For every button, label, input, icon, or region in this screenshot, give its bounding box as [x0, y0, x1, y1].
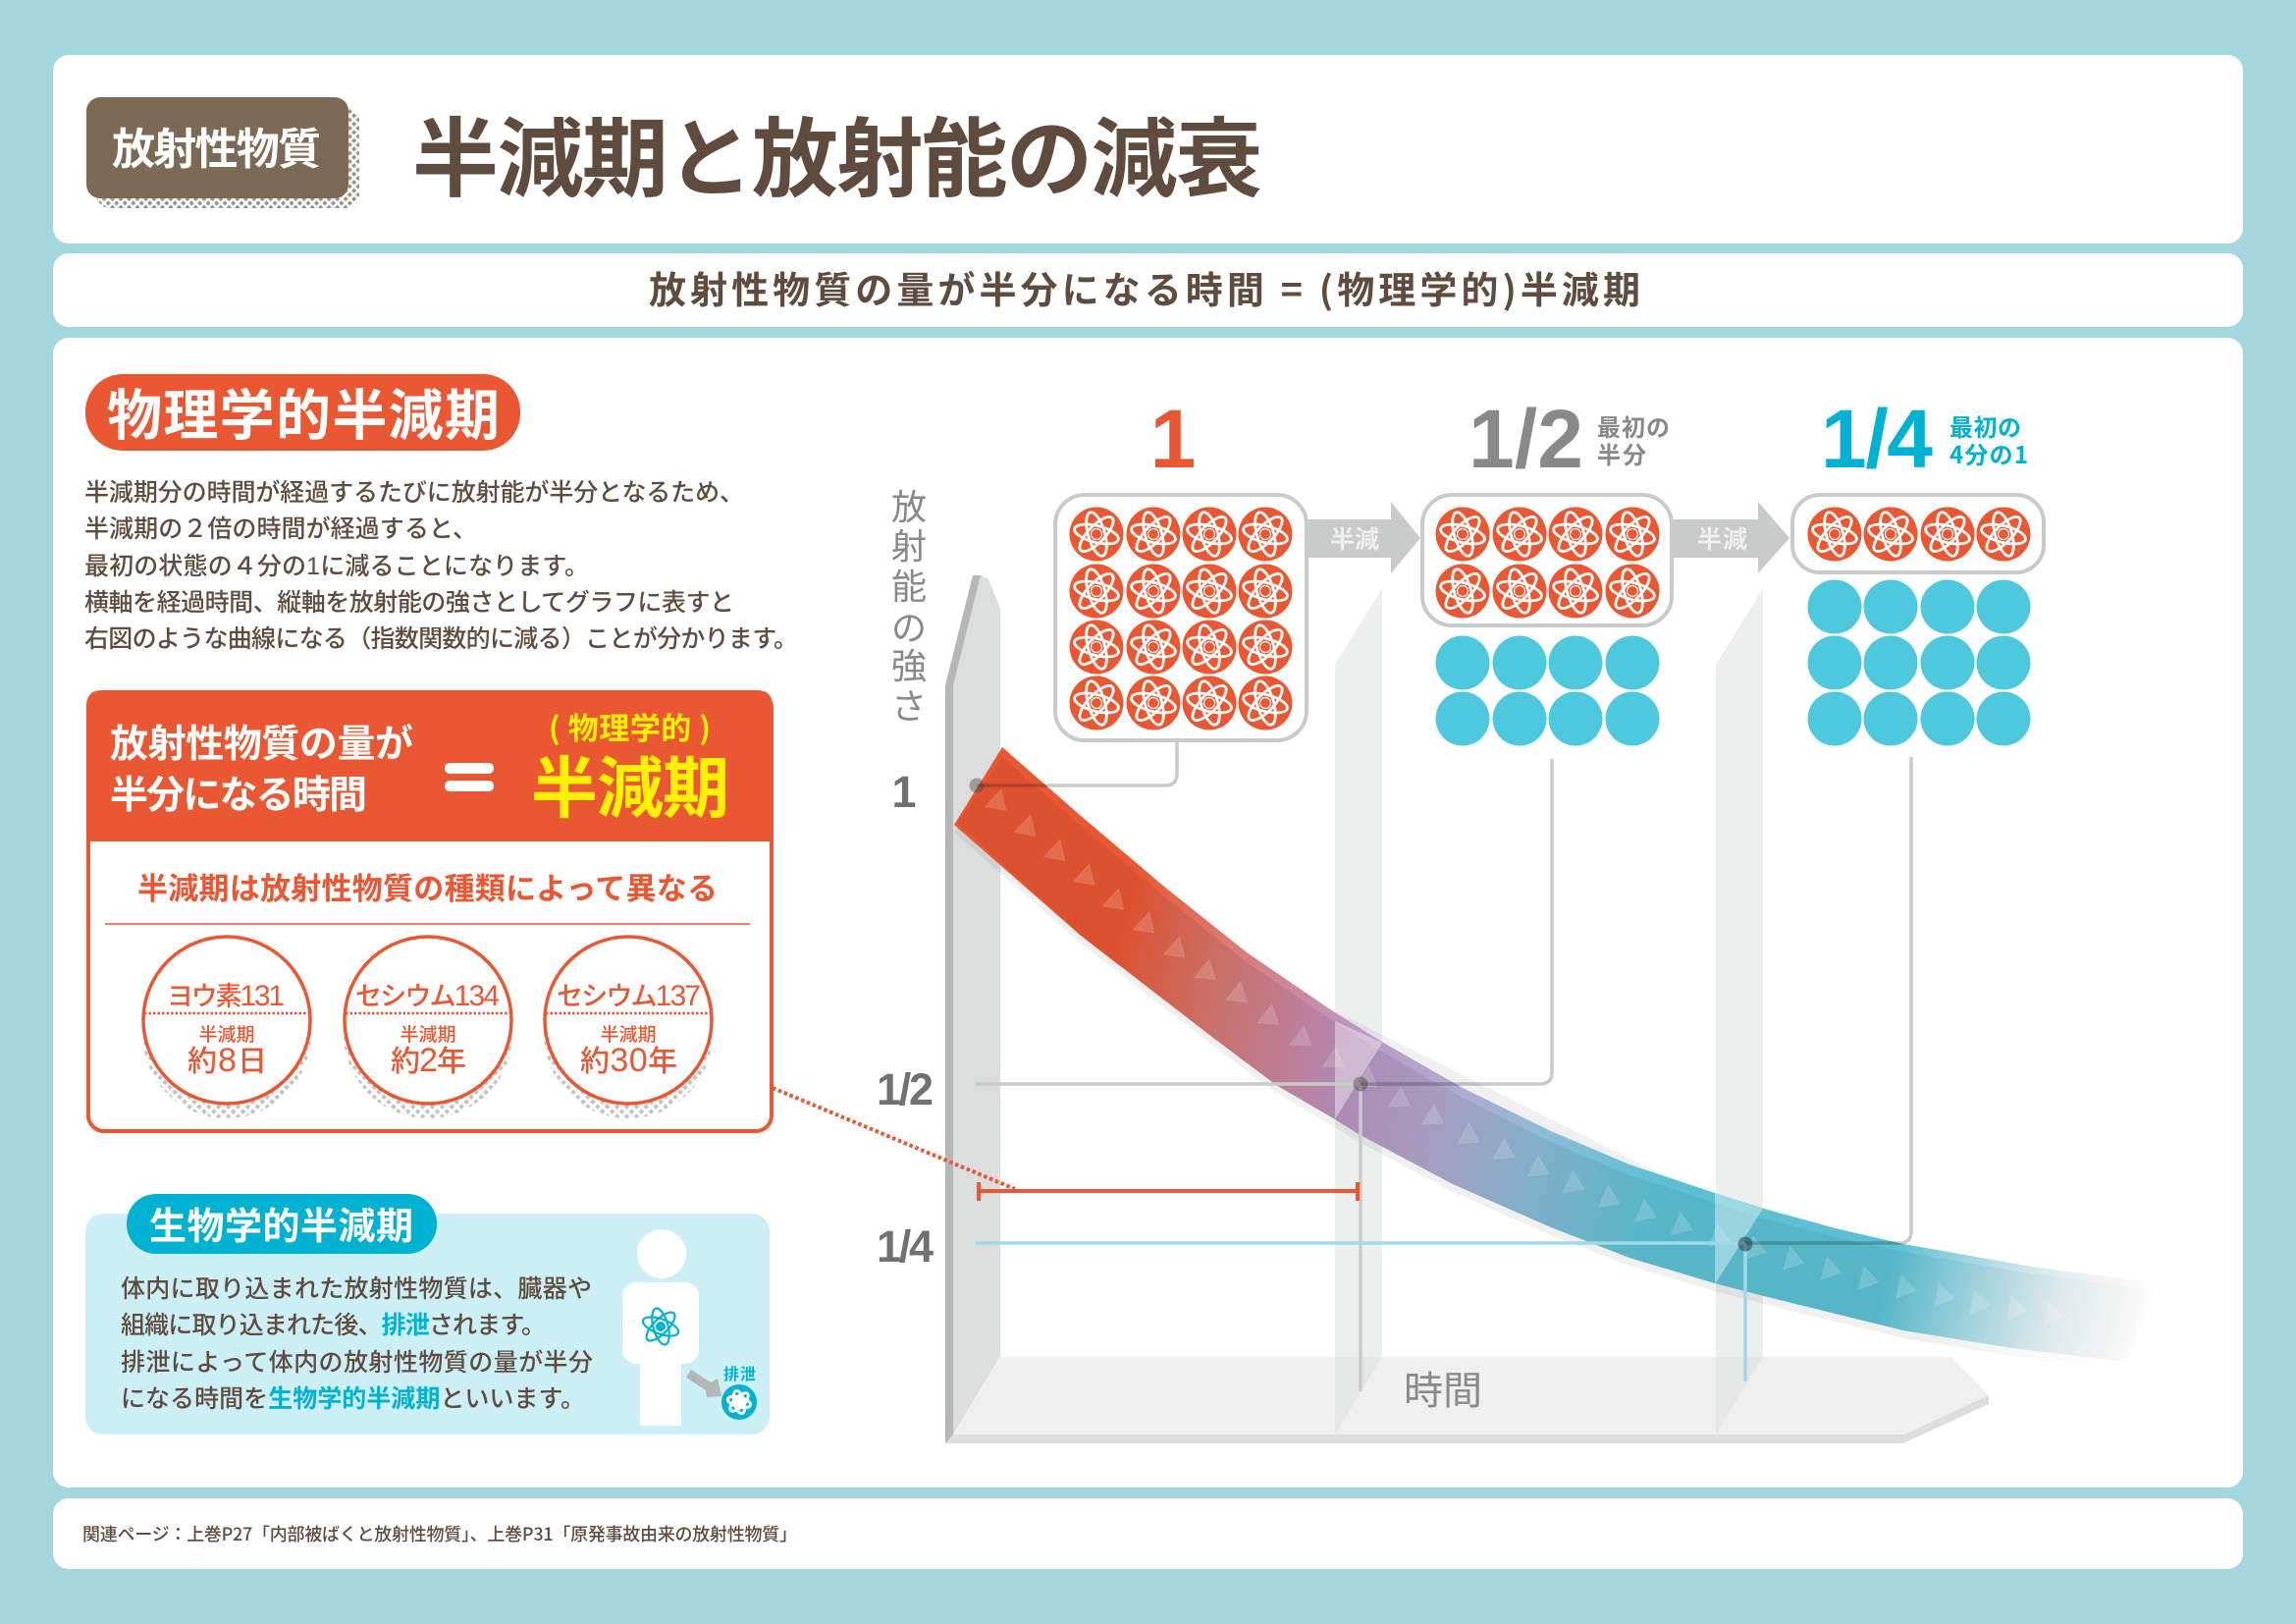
- label: excretion: 排泄: [723, 1361, 756, 1384]
- circle: iodine 131: ヨウ素131: [167, 980, 285, 1012]
- label: amount 1/4: 最初の: [1949, 408, 2021, 443]
- point: level 1: [970, 778, 984, 793]
- text block: biological explanation: になる時間を生物学的半減期といいます。: [121, 1385, 585, 1413]
- circle: cesium 134: セシウム134: [355, 980, 500, 1012]
- circle: cesium 137: セシウム137: [557, 980, 701, 1012]
- panel: definition strip: [53, 253, 2243, 327]
- text block: explanation: 半減期分の時間が経過するたびに放射能が半分となるため、: [84, 479, 744, 507]
- circle: iodine 131: [142, 937, 311, 1118]
- circle: cesium 137: 半減期: [600, 1020, 657, 1047]
- panel: title: [53, 55, 2243, 244]
- decayed atoms: 8: [1435, 636, 1659, 746]
- decay band: [954, 747, 2158, 1362]
- text block: biological explanation: 組織に取り込まれた後、排泄されます。: [121, 1312, 546, 1339]
- category tag: 放射性物質: [112, 114, 321, 177]
- arrow: halving 1: 半減: [1330, 520, 1379, 556]
- panel: definition strip: 放射性物質の量が半分になる時間 = (物理学的)半減期: [649, 260, 1640, 314]
- panel: main content: [53, 338, 2243, 1488]
- circle: iodine 131: 半減期: [198, 1020, 255, 1047]
- panel: half-life definition box: [86, 690, 773, 1131]
- label: amount 1/4: [1821, 393, 2028, 485]
- band shadow: [954, 766, 2150, 1370]
- text block: explanation: 右図のような曲線になる（指数関数的に減る）ことが分かります。: [84, 625, 798, 653]
- arrow: halving 1: [1308, 502, 1420, 573]
- leader: level 1: [977, 742, 1177, 785]
- flow arrows on band: [985, 789, 2066, 1328]
- circle: cesium 134: 約2年: [391, 1042, 466, 1079]
- category tag: [86, 97, 359, 208]
- y-axis tick 1/4: 1/4: [877, 1221, 934, 1272]
- wall overlay on band: [1715, 1193, 1763, 1284]
- circle: iodine 131: 約8日: [187, 1042, 267, 1079]
- icon: excretion arrow: [686, 1370, 721, 1397]
- label: amount 1/2: 1/2: [1468, 393, 1583, 485]
- arrow: halving 2: [1674, 502, 1789, 573]
- arrow: halving 2: 半減: [1697, 520, 1747, 556]
- text block: biological explanation: 体内に取り込まれた放射性物質は、臓器や: [121, 1275, 592, 1303]
- left wall: [945, 575, 1000, 1443]
- atom box: 16 atoms: [1055, 495, 1307, 740]
- text block: explanation: 半減期の２倍の時間が経過すると、: [84, 515, 477, 543]
- panel: biological half-life: [85, 1194, 770, 1435]
- text block: biological explanation: [121, 1275, 593, 1413]
- heading: physical half-life: 物理学的半減期: [107, 372, 500, 452]
- box header: 半分になる時間: [110, 765, 367, 820]
- text block: biological explanation: 排泄によって体内の放射性物質の量が半分: [121, 1349, 593, 1377]
- floor: [945, 1357, 1989, 1443]
- label: amount 1/2: 最初の: [1597, 408, 1670, 443]
- callout dotted connector: [773, 1088, 1015, 1189]
- panel: footer references: 関連ページ：上巻P27「内部被ばくと放射性物質」、上巻P31「原発事故由来の放射性物質」: [82, 1521, 797, 1546]
- atom box: 8 atoms: [1422, 495, 1672, 625]
- decayed atoms: 12: [1808, 579, 2030, 746]
- box header: [86, 690, 773, 841]
- wall at first half-life: [1335, 588, 1382, 1435]
- label: amount 1/2: [1468, 393, 1670, 485]
- y-axis title: 放射能の強さ: [891, 479, 927, 730]
- circle: cesium 137: 約30年: [580, 1042, 677, 1079]
- label: amount 1/4: 4分の1: [1949, 436, 2028, 470]
- circle: cesium 134: 半減期: [400, 1020, 456, 1047]
- label: amount 1: 1: [1150, 393, 1196, 485]
- wall overlay on band: [1335, 1021, 1382, 1119]
- box header: ( 物理学的 ): [549, 704, 711, 748]
- subheading: 半減期は放射性物質の種類によって異なる: [137, 864, 718, 908]
- point: level 1/2: [1353, 1076, 1368, 1092]
- leader: level 1/4: [976, 757, 1911, 1381]
- text block: explanation: 横軸を経過時間、縦軸を放射能の強さとしてグラフに表すと: [84, 589, 734, 617]
- box header: 放射性物質の量が: [110, 714, 413, 769]
- leader: level 1/2: [976, 759, 1552, 1391]
- chart: half-life decay curve: [773, 479, 2158, 1443]
- icon: human figure: [622, 1229, 699, 1426]
- y-axis tick 1/2: 1/2: [877, 1064, 934, 1114]
- icon: excreted atom: [721, 1384, 757, 1420]
- text block: explanation: 最初の状態の４分の1に減ることになります。: [84, 553, 589, 580]
- half-life span bracket: [977, 1182, 1360, 1201]
- point: level 1/4: [1737, 1237, 1753, 1251]
- x-axis title: 時間: [1404, 1359, 1482, 1416]
- heading: biological half-life: 生物学的半減期: [149, 1196, 413, 1250]
- wall at second half-life: [1716, 588, 1763, 1435]
- circle: cesium 137: [544, 937, 713, 1118]
- panel: footer references: [53, 1498, 2243, 1569]
- circle: cesium 134: [344, 937, 512, 1118]
- label: amount 1/4: 1/4: [1821, 393, 1933, 485]
- title heading: 半減期と放射能の減衰: [412, 90, 1262, 215]
- text block: explanation: [84, 479, 798, 653]
- box header: 半減期: [531, 734, 729, 832]
- label: amount 1/2: 半分: [1597, 436, 1646, 470]
- y-axis tick 1: 1: [891, 767, 917, 817]
- atom box: 4 atoms: [1792, 495, 2044, 572]
